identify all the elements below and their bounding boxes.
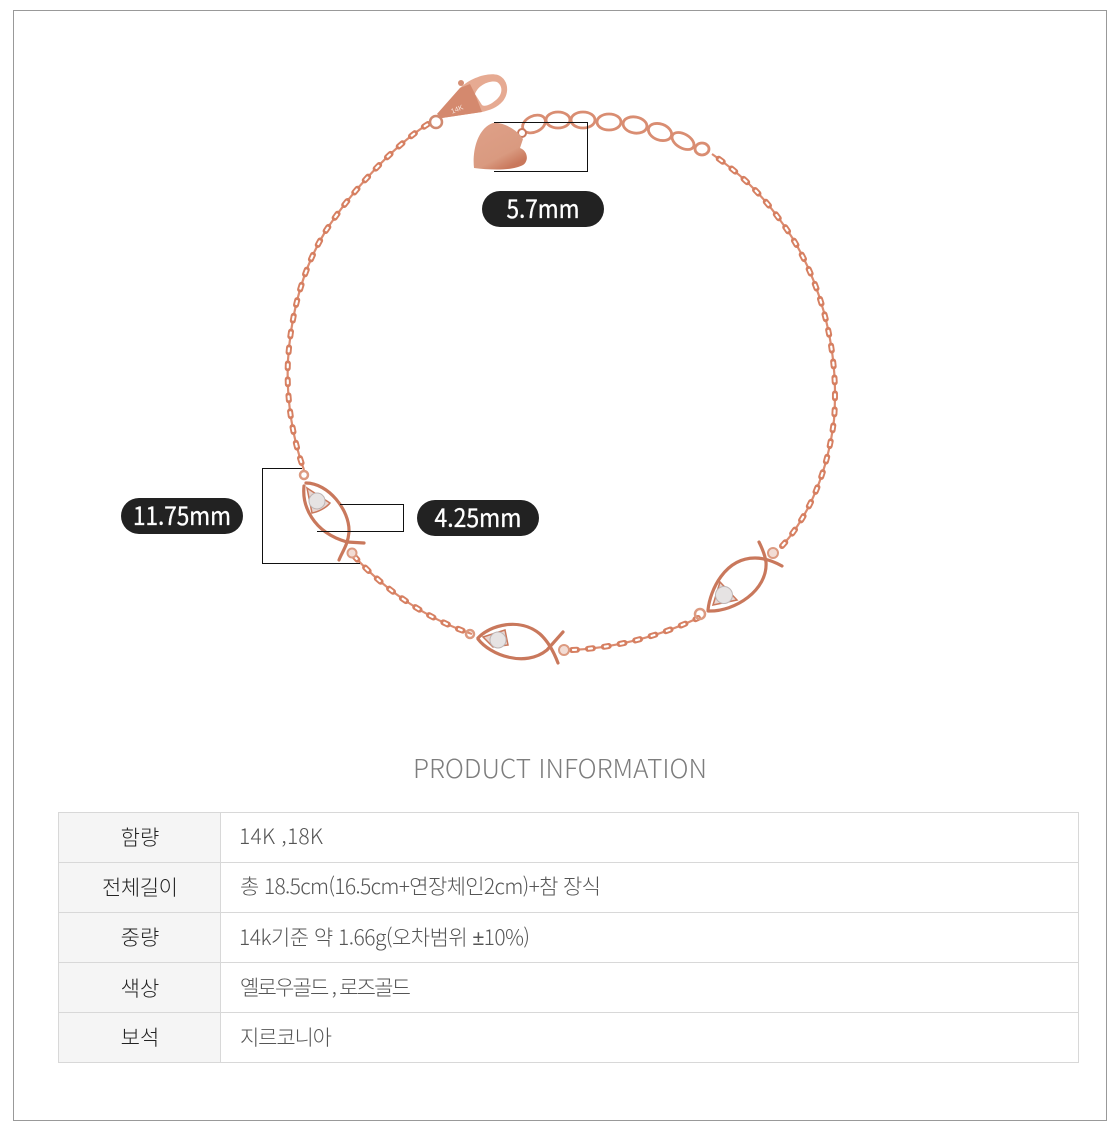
bracelet photo bbox=[288, 74, 835, 663]
heading: product information: PRODUCT INFORMATION bbox=[413, 749, 707, 786]
measure bracket: fish height bbox=[317, 504, 404, 532]
row: 전체길이: 전체길이 bbox=[102, 872, 178, 902]
row: 색상: 색상 bbox=[121, 973, 159, 1003]
icon: lobster clasp bbox=[430, 74, 507, 128]
chain: between first and second fish bbox=[354, 556, 472, 634]
chain: left side up to clasp bbox=[288, 124, 428, 470]
row: 함량 bbox=[121, 821, 323, 852]
icon: fish pendant 2 bbox=[466, 624, 569, 663]
chain: between second and third fish bbox=[572, 618, 698, 650]
row: 전체길이: 총 18.5cm(16.5cm+연장체인2cm)+참 장식 bbox=[240, 871, 601, 901]
row: 중량: 중량 bbox=[121, 922, 159, 952]
row: 색상: 옐로우골드 , 로즈골드 bbox=[240, 972, 411, 1002]
icon: heart charm bbox=[474, 123, 527, 170]
row: 보석: 보석 bbox=[121, 1022, 159, 1052]
table header column background bbox=[58, 812, 220, 1062]
icon: fish pendant 3 bbox=[695, 542, 782, 619]
table grid bbox=[58, 812, 1078, 1062]
measure bracket: fish length bbox=[262, 468, 360, 564]
chain: right side bbox=[712, 154, 835, 546]
label: 5.7mm bbox=[482, 190, 604, 227]
icon: fish pendant 1 bbox=[300, 471, 364, 560]
label: 5.7mm: 5.7mm bbox=[506, 190, 580, 226]
extension chain bbox=[520, 112, 709, 155]
row: 중량: 14k기준 약 1.66g(오차범위 ±10%) bbox=[239, 922, 530, 952]
row: 보석: 지르코니아 bbox=[240, 1022, 332, 1052]
row: 함량: 14K ,18K bbox=[239, 821, 323, 851]
label: 4.25mm: 4.25mm bbox=[434, 499, 522, 535]
measure bracket: heart charm bbox=[494, 122, 588, 172]
row: 보석 bbox=[121, 1022, 332, 1052]
row: 색상 bbox=[121, 972, 411, 1003]
label: 11.75mm: 11.75mm bbox=[133, 497, 231, 533]
product information table bbox=[58, 812, 1078, 1062]
row: 함량: 함량 bbox=[121, 822, 159, 852]
icon: lobster clasp: 14K bbox=[450, 104, 465, 116]
